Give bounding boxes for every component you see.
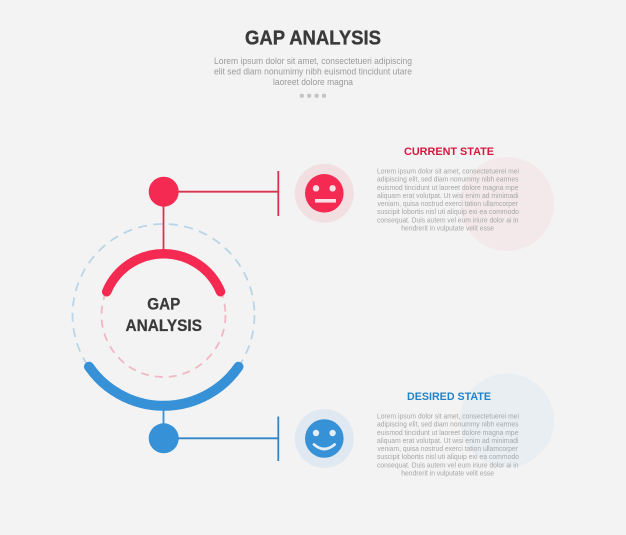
text block: desired state: adipiscing elit, sed diam nonummy nibh earmes	[377, 420, 519, 429]
text block: desired state: Lorem ipsum dolor sit amet, consectetuerei mei	[377, 412, 519, 420]
text block: current state: Lorem ipsum dolor sit amet, consectetuerei mei	[377, 166, 519, 176]
backdrop circle: current state	[460, 157, 554, 251]
backdrop circle: desired state	[460, 374, 554, 468]
subtitle text block	[214, 56, 412, 87]
text block: desired state: veniam, quisa nostrud exerci tation ullamcorper	[378, 444, 519, 453]
heading: current state: CURRENT STATE	[404, 146, 494, 158]
pagination dots	[300, 94, 326, 98]
node: blue with connector	[149, 410, 278, 461]
text block: desired state	[377, 412, 519, 478]
text block: current state: veniam, quisa nostrud exerci tation ullamcorper	[378, 199, 519, 208]
text block: desired state: aliquam erat volutpat. Ut wisi enim ad minimadi	[377, 436, 519, 445]
subtitle text block: laoreet dolore magna	[273, 77, 354, 87]
text block: desired state: euismod tincidunt ut laoreet dolore magna mpe	[377, 428, 518, 437]
connector: red stem	[162, 200, 164, 252]
text block: current state: suscipit lobortis nisl uti aliquip exi ea commodo	[377, 207, 519, 216]
center label: ANALYSIS	[126, 317, 202, 335]
inner dashed ring	[102, 253, 226, 377]
icon: smiling face	[295, 409, 354, 468]
heading: desired state: DESIRED STATE	[407, 391, 491, 403]
text block: current state: consequat. Duis autem vel eum iriure dolor ai in	[377, 215, 519, 224]
icon: neutral face	[295, 164, 354, 223]
text block: desired state: consequat. Duis autem vel eum iriure dolor ai in	[377, 460, 519, 469]
red arc: current state	[107, 254, 220, 292]
title: GAP ANALYSIS	[245, 28, 381, 50]
text block: desired state: hendrerit in vulputate velit esse	[401, 468, 494, 478]
center label: GAP	[147, 296, 180, 314]
subtitle text block: Lorem ipsum dolor sit amet, consectetueri adipiscing	[214, 56, 412, 66]
outer dashed ring	[72, 224, 254, 406]
node: red with connector	[149, 171, 278, 216]
text block: current state: aliquam erat volutpat. Ut wisi enim ad minimadi	[377, 191, 519, 200]
text block: current state: hendrerit in vulputate velit esse	[401, 224, 494, 232]
center label	[126, 296, 202, 335]
text block: current state	[377, 166, 519, 232]
blue arc: desired state	[89, 367, 238, 406]
text block: current state: euismod tincidunt ut laoreet dolore magna mpe	[377, 183, 518, 192]
text block: current state: adipiscing elit, sed diam nonummy nibh earmes	[377, 175, 519, 184]
text block: desired state: suscipit lobortis nisl uti aliquip exi ea commodo	[377, 452, 519, 461]
subtitle text block: elit sed diam nonumimy nibh euismod tincidunt utare	[214, 66, 412, 76]
